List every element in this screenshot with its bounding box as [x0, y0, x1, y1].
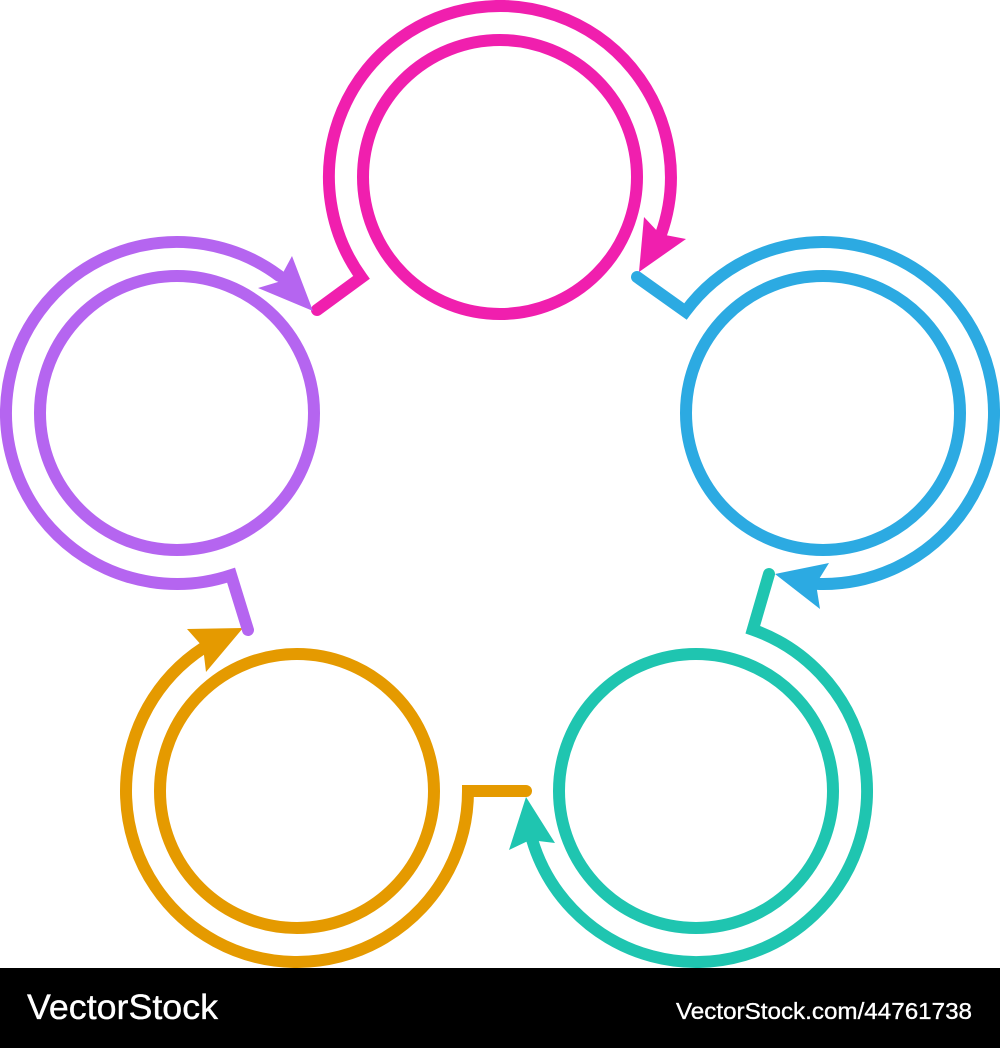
ring: orange step	[126, 628, 526, 962]
footer image url: VectorStock.com/44761738	[676, 998, 972, 1024]
ring: magenta step	[317, 6, 686, 314]
ring: blue step	[637, 242, 994, 609]
footer bar	[0, 968, 1000, 1048]
footer brand name: VectorStock	[27, 988, 219, 1027]
ring: teal step	[509, 574, 867, 962]
ring: purple step	[6, 242, 314, 630]
